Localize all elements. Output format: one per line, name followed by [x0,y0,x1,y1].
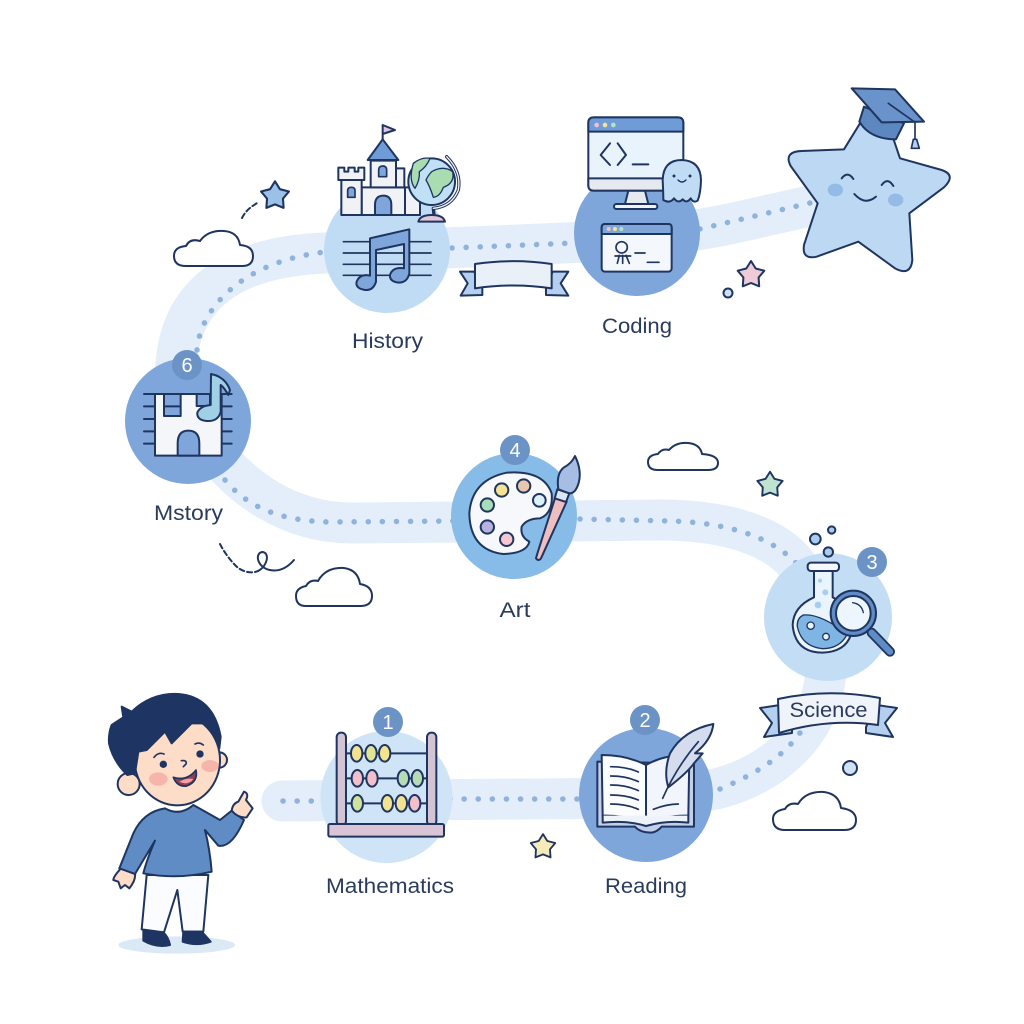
icon: abacus [328,733,444,837]
icon: flask and magnifier [793,526,890,653]
label: Reading: Reading [605,875,687,898]
character: boy pointing [109,694,253,954]
step history circle [324,187,450,313]
badge 1: 1 [382,712,394,734]
pointing hand [232,792,253,817]
star face [828,175,903,206]
left hand [113,869,135,888]
badge 6 [172,350,202,380]
ground shadow [118,936,235,954]
icon: computer monitor and terminal [588,117,701,272]
step 4 circle: art [451,453,577,579]
decoration: dots and swooshes [220,202,857,775]
dotted route line [197,203,810,801]
badge 1 [373,707,403,737]
shoes [143,931,211,946]
step 3 circle: science [764,553,892,681]
graduation cap [852,88,924,148]
badge 6: 6 [181,355,193,377]
icon: music notes on staff [343,229,431,290]
winding learning path band [176,206,826,801]
badge 4 [500,435,530,465]
icon: castle [338,125,420,215]
decoration: small stars [261,181,783,857]
badge 3: 3 [866,552,878,574]
star body [789,123,950,271]
step coding circle [574,170,700,296]
label: History: History [352,330,424,353]
step 6 circle: mystory [125,358,251,484]
icon: globe [408,157,459,222]
badge 2 [630,705,660,735]
icon: palette and brush [469,456,580,560]
label: Coding: Coding [602,315,672,338]
badge 2: 2 [639,710,651,732]
goal star with graduation cap [789,88,950,271]
trousers [142,875,208,932]
step 2 circle: reading [579,728,713,862]
badge 3 [857,547,887,577]
icon: castle with staff and note [144,374,232,456]
label: Art: Art [500,599,531,622]
decoration: clouds [174,231,856,830]
empty ribbon banner [460,261,568,296]
label: Mstory: Mstory [154,502,224,525]
icon: open book with quill [597,724,713,833]
banner: Science [760,693,897,737]
step 1 circle: mathematics [320,731,452,863]
badge 4: 4 [509,440,521,462]
head [109,694,227,805]
sweater [119,805,244,876]
label: Mathematics: Mathematics [326,875,454,898]
label: Science: Science [790,699,868,722]
